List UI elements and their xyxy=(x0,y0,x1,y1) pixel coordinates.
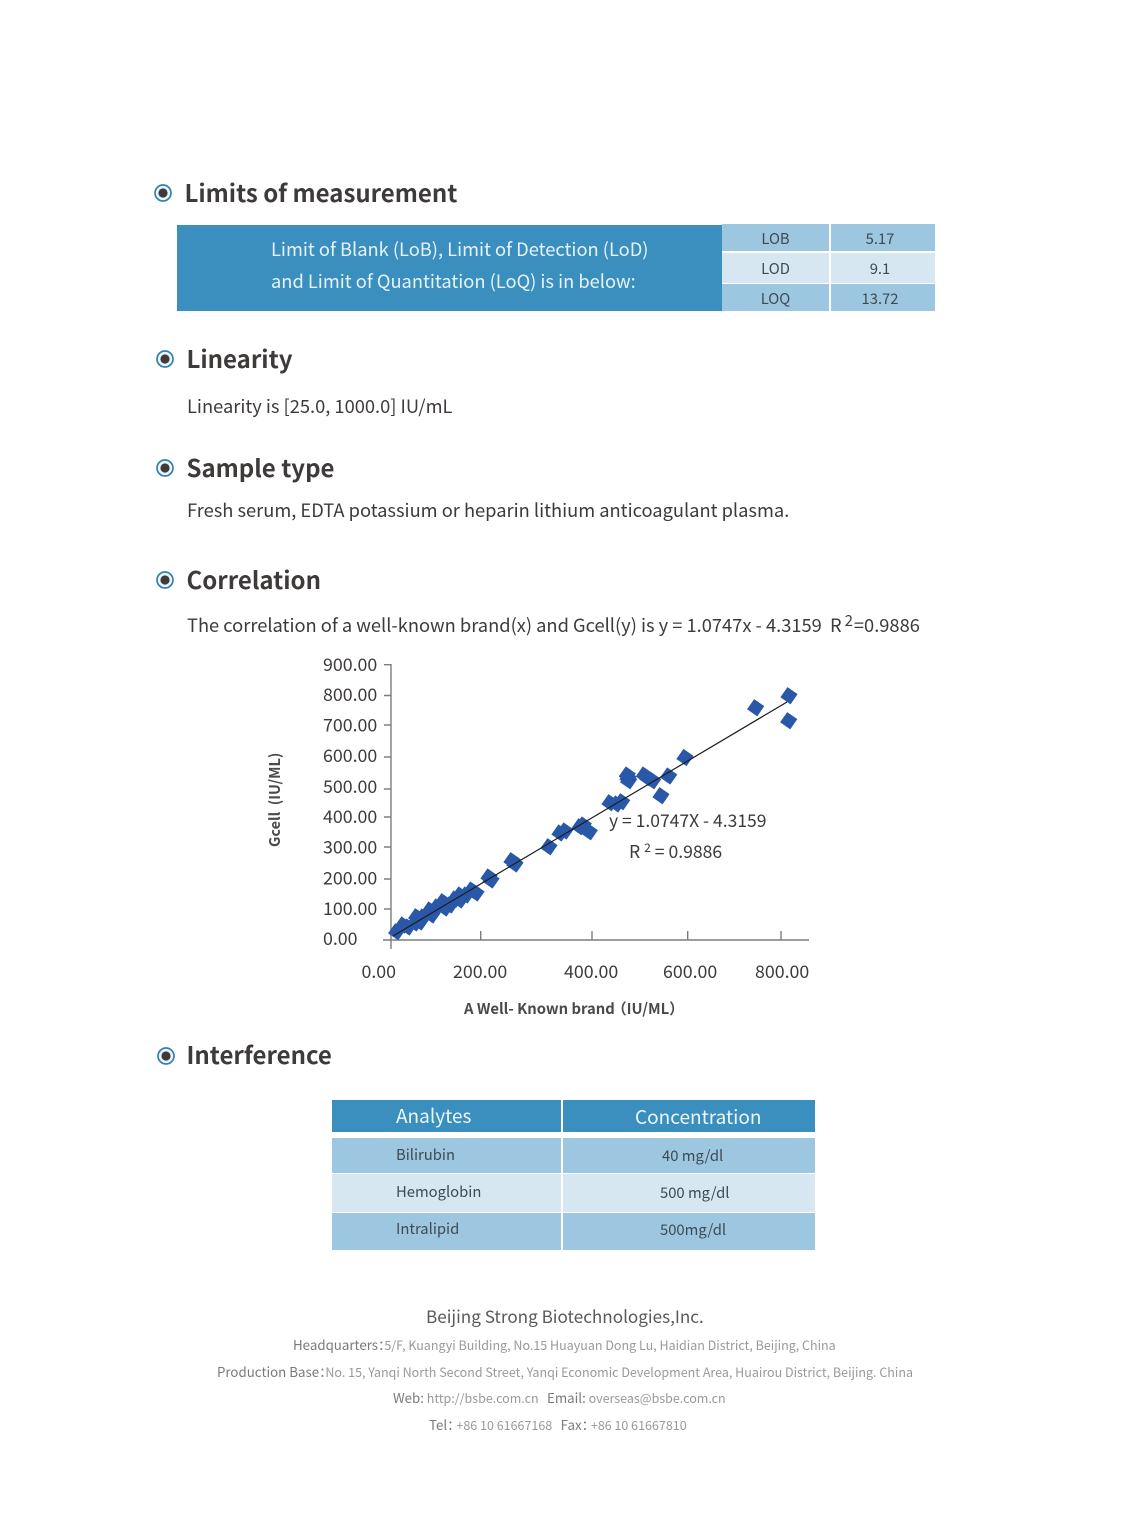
row: intralipid name: Intralipid xyxy=(396,1218,459,1239)
icon: section bullet, correlation xyxy=(156,571,174,589)
x axis tick labels: 800.00 xyxy=(755,958,809,984)
r squared: 2 xyxy=(644,839,651,856)
row: hemoglobin concentration: 500 mg/dl xyxy=(660,1182,729,1203)
row: hemoglobin name: Hemoglobin xyxy=(396,1181,481,1202)
row: bilirubin concentration: 40 mg/dl xyxy=(662,1145,723,1166)
y axis tick labels: 0.00 xyxy=(323,925,358,951)
y axis tick labels: 800.00 xyxy=(323,681,377,707)
y axis tick labels: 400.00 xyxy=(323,803,377,829)
LOD value: 9.1 xyxy=(870,258,890,279)
description banner xyxy=(177,225,722,311)
icon: section bullet, limits of measurement xyxy=(154,184,172,202)
row: intralipid concentration xyxy=(563,1213,815,1250)
LOQ label: LOQ xyxy=(761,288,790,309)
y axis tick labels: 600.00 xyxy=(323,742,377,768)
y axis tick labels: 900.00 xyxy=(323,651,377,677)
y axis tick labels: 500.00 xyxy=(323,773,377,799)
x axis tick labels: 600.00 xyxy=(663,958,717,984)
row: intralipid concentration: 500mg/dl xyxy=(660,1219,726,1240)
LOB value: 5.17 xyxy=(866,228,894,249)
text: correlation equation: The correlation of a well-known brand(x) and Gcell(y) is y = 1.0747x - 4.3159 R2=0.9886 xyxy=(187,610,920,638)
text: linearity range: Linearity is [25.0, 1000.0] IU/mL xyxy=(187,393,452,419)
LOQ value xyxy=(831,284,935,311)
axes xyxy=(383,664,809,949)
LOB label xyxy=(722,224,829,251)
web and email: Web: http://bsbe.com.cn Email: overseas@bsbe.com.cn xyxy=(393,1388,726,1407)
company name: Beijing Strong Biotechnologies,Inc. xyxy=(426,1303,704,1328)
production base: Production Base：No. 15, Yanqi North Second Street, Yanqi Economic Development Area, Huairou District, Beijing. China xyxy=(217,1362,913,1381)
panel: limits table xyxy=(177,224,935,311)
row: hemoglobin name xyxy=(332,1174,561,1212)
scatter chart xyxy=(264,651,809,1019)
row: bilirubin name: Bilirubin xyxy=(396,1144,455,1165)
LOQ value: 13.72 xyxy=(862,288,898,309)
trend equation: y = 1.0747X - 4.3159 xyxy=(609,808,766,833)
header: analytes: Analytes xyxy=(396,1102,471,1129)
y axis tick labels xyxy=(323,651,377,951)
heading: limits of measurement: Limits of measurement xyxy=(184,174,457,209)
banner text line 1: Limit of Blank (LoB), Limit of Detection (LoD) xyxy=(271,236,648,262)
LOB label: LOB xyxy=(761,228,790,249)
icon: section bullet, interference xyxy=(157,1047,175,1065)
heading: sample type: Sample type xyxy=(186,449,334,484)
row: intralipid name xyxy=(332,1213,561,1250)
footer: company info xyxy=(217,1303,913,1434)
row: bilirubin name xyxy=(332,1138,561,1173)
y axis title: Gcell (IU/ML) xyxy=(264,753,285,847)
LOD value xyxy=(831,253,935,283)
LOB value xyxy=(831,224,935,251)
x axis tick labels xyxy=(362,958,809,984)
text: sample types: Fresh serum, EDTA potassium or heparin lithium anticoagulant plasma. xyxy=(187,497,789,523)
y axis tick labels: 700.00 xyxy=(323,712,377,738)
heading: linearity: Linearity xyxy=(186,340,292,375)
row: bilirubin concentration xyxy=(563,1138,815,1173)
r squared: = 0.9886 xyxy=(651,839,722,864)
heading: interference: Interference xyxy=(186,1036,332,1071)
x axis tick labels: 0.00 xyxy=(362,958,396,984)
panel: interference table xyxy=(332,1100,815,1250)
LOD label: LOD xyxy=(761,258,790,279)
trend line xyxy=(393,702,787,936)
r squared: R xyxy=(629,839,640,864)
y axis tick labels: 300.00 xyxy=(323,834,377,860)
data points xyxy=(388,687,798,940)
x axis tick labels: 200.00 xyxy=(453,958,507,984)
icon: section bullet, sample type xyxy=(156,459,174,477)
row: hemoglobin concentration xyxy=(563,1174,815,1212)
header: analytes xyxy=(332,1100,561,1132)
icon: section bullet, linearity xyxy=(156,350,174,368)
x axis tick labels: 400.00 xyxy=(564,958,618,984)
y axis tick labels: 200.00 xyxy=(323,864,377,890)
telephone and fax: Tel：+86 10 61667168 Fax：+86 10 61667810 xyxy=(429,1415,687,1434)
y axis tick labels: 100.00 xyxy=(323,895,377,921)
header: concentration xyxy=(563,1100,815,1132)
LOD label xyxy=(722,253,829,283)
header: concentration: Concentration xyxy=(635,1103,762,1130)
heading: correlation: Correlation xyxy=(186,561,321,596)
banner text line 2: and Limit of Quantitation (LoQ) is in below: xyxy=(271,268,636,294)
x axis title: A Well- Known brand（IU/ML） xyxy=(463,998,684,1019)
headquarters: Headquarters：5/F, Kuangyi Building, No.15 Huayuan Dong Lu, Haidian District, Beijing, China xyxy=(293,1335,836,1354)
LOQ label xyxy=(722,284,829,311)
